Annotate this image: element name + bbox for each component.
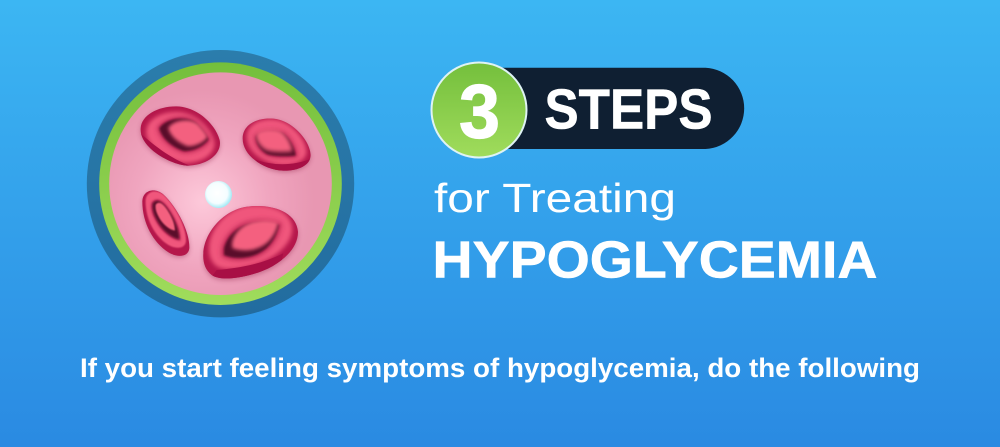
blood cell: top left xyxy=(141,106,220,167)
numeral 3: 3 xyxy=(459,70,500,154)
illustration: blood cells in circle xyxy=(87,50,354,317)
main heading: HYPOGLYCEMIA xyxy=(432,232,878,290)
badge: 3 steps xyxy=(432,62,744,158)
blood cell: top right xyxy=(243,119,312,173)
word steps: STEPS xyxy=(544,78,712,142)
pill xyxy=(480,68,744,149)
white pearl xyxy=(205,181,232,208)
subheading: for Treating xyxy=(434,175,676,221)
blood cell: lower right xyxy=(203,205,298,283)
green circle xyxy=(432,62,526,158)
blood cell: lower left xyxy=(142,190,189,258)
intro sentence: If you start feeling symptoms of hypoglycemia, do the following xyxy=(80,353,920,383)
